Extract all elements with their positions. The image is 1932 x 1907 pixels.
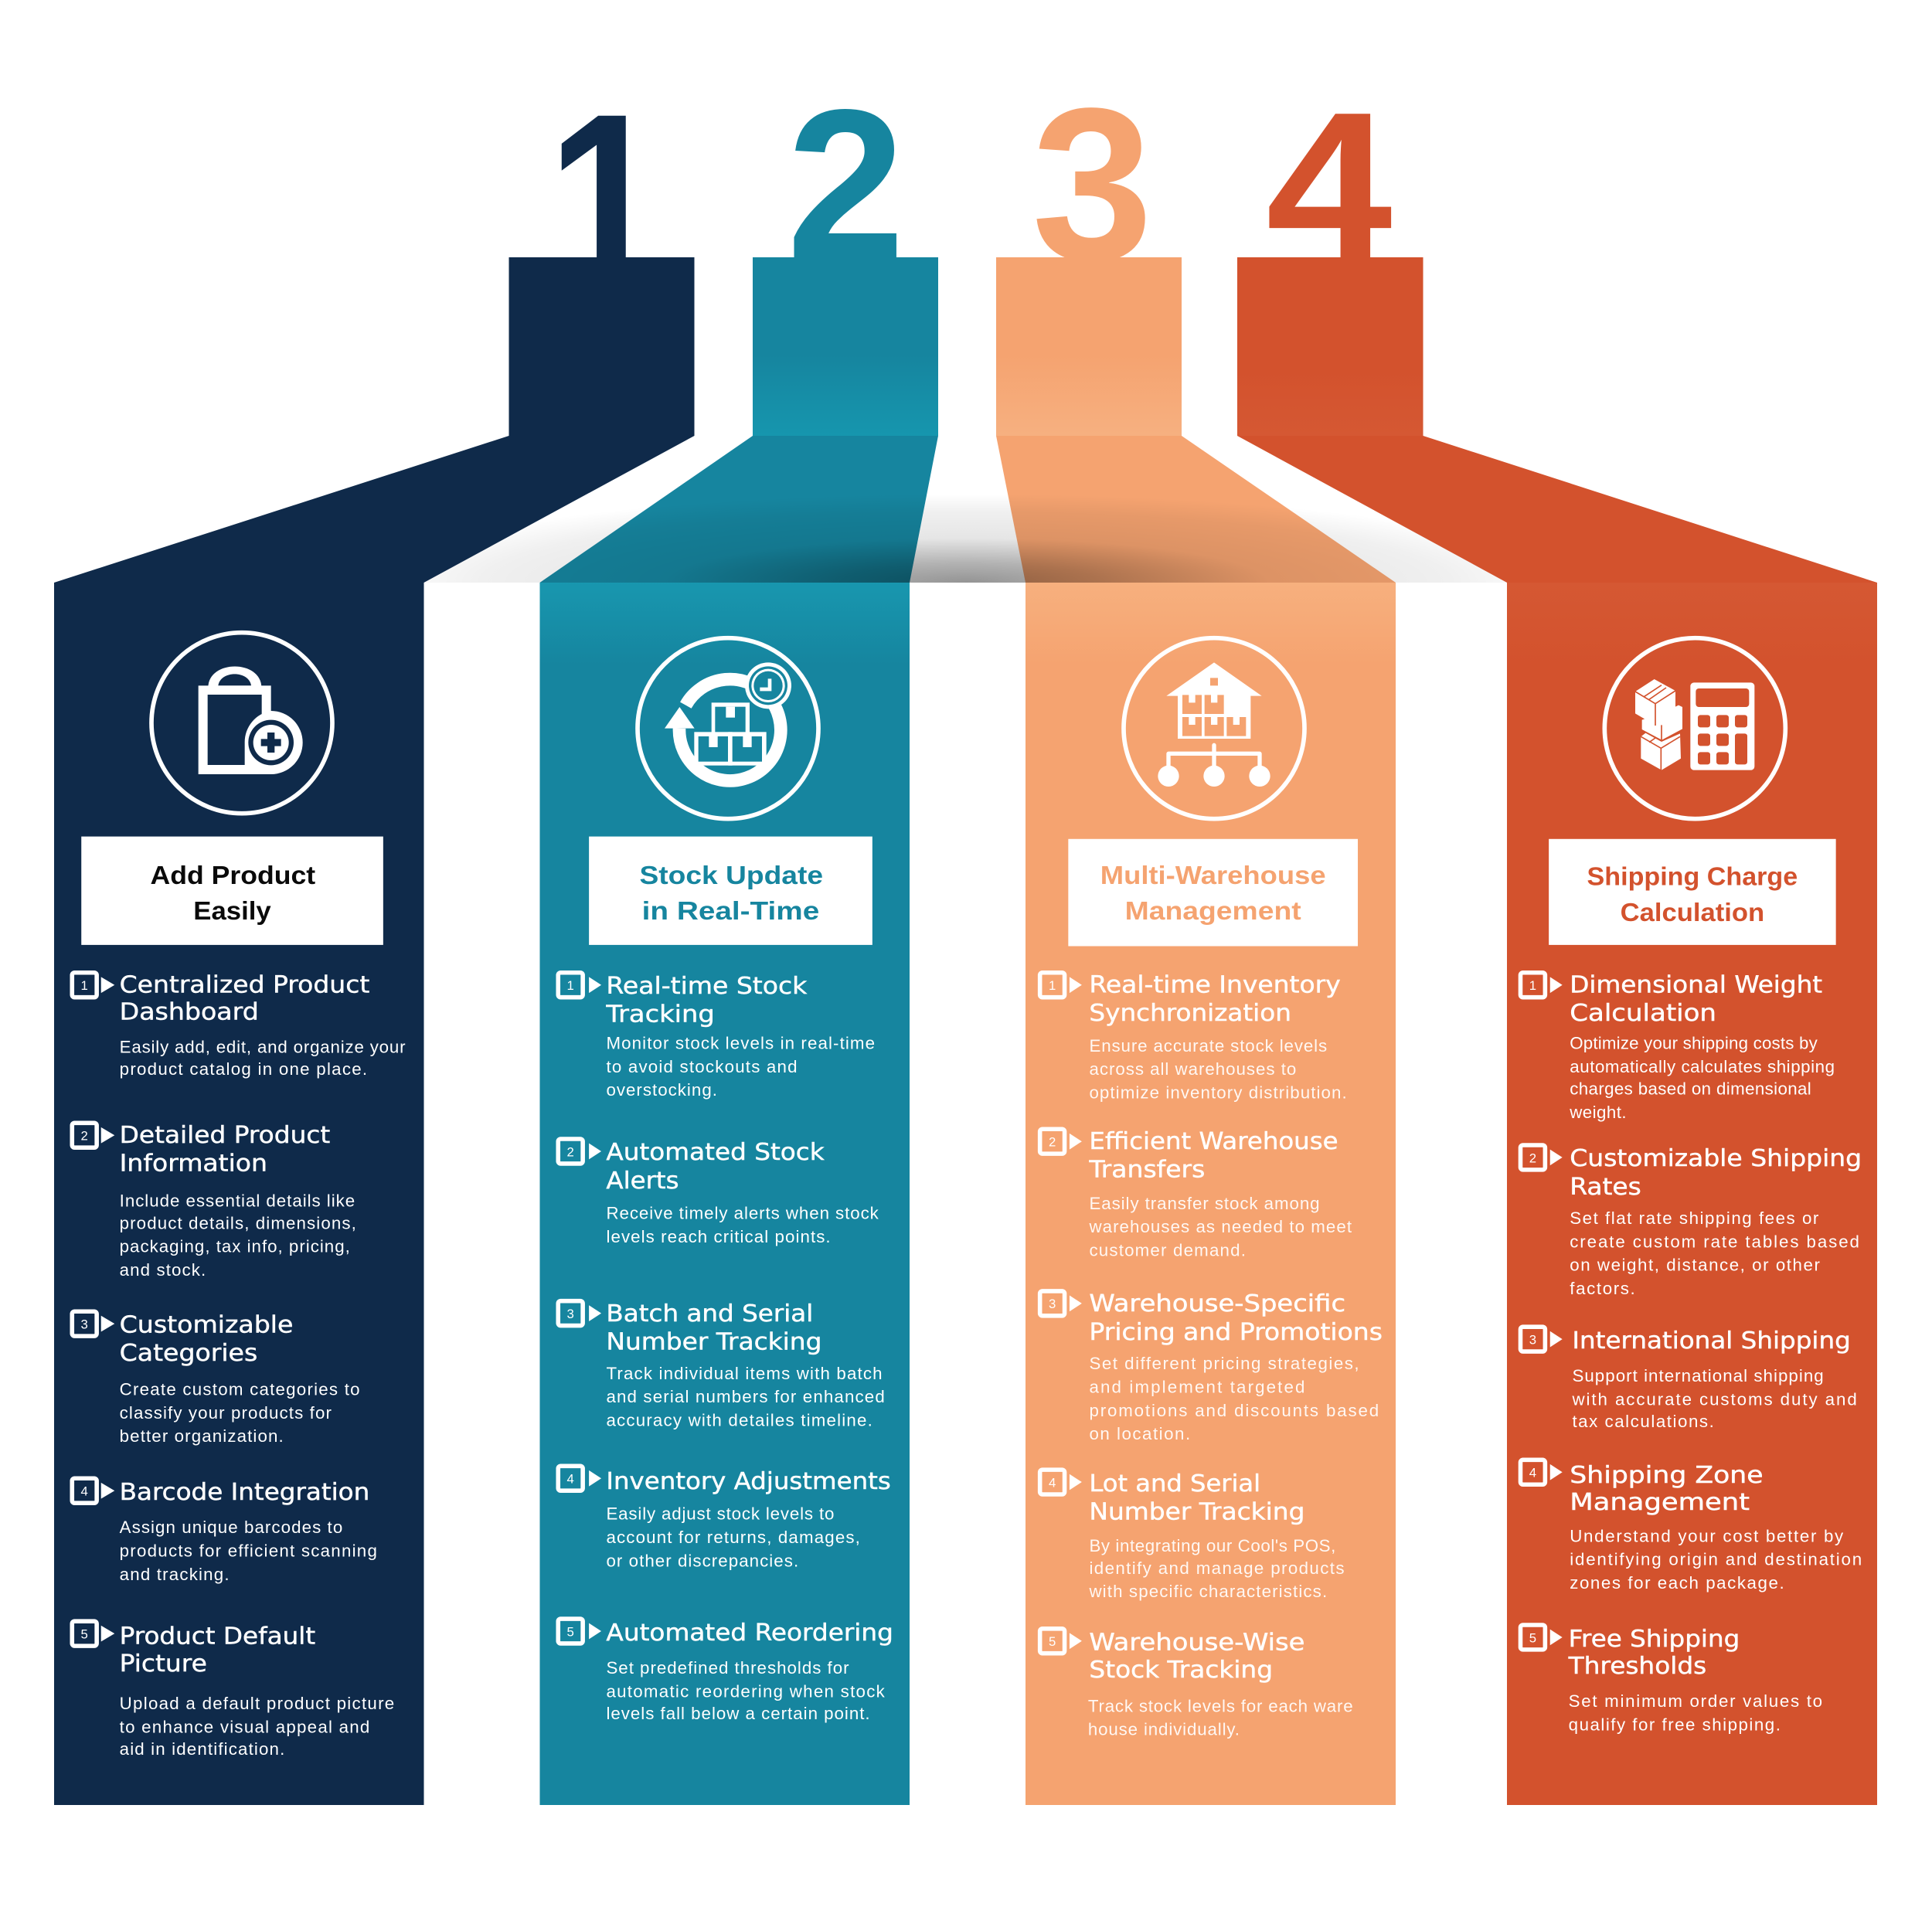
item: Customizable Shipping Rates (1520, 1145, 1862, 1298)
title card: Stock Update in Real-Time: in Real-Time (642, 897, 819, 926)
item: Real-time Inventory Synchronization: Ensure accurate stock levels (1089, 1036, 1327, 1055)
item: Automated Stock Alerts (558, 1139, 879, 1246)
ribbon: column 2 (539, 257, 938, 1805)
title card: Multi-Warehouse Management (1068, 839, 1358, 946)
item: Customizable Shipping Rates: on weight, distance, or other (1570, 1256, 1820, 1275)
item: Automated Stock Alerts: levels reach critical points. (606, 1227, 831, 1246)
icon: stock update cycle (638, 638, 818, 819)
title card: Add Product Easily: Add Product (151, 862, 315, 890)
item: Barcode Integration: products for efficient scanning (120, 1542, 377, 1561)
list: column 4 features (1520, 971, 1862, 1734)
item: Barcode Integration: and tracking. (120, 1565, 230, 1584)
item: Customizable Shipping Rates: factors. (1570, 1279, 1635, 1298)
item: Lot and Serial Number Tracking (1040, 1470, 1344, 1601)
item: Inventory Adjustments: Easily adjust stock levels to (606, 1504, 834, 1524)
ribbon: column 3 (996, 257, 1396, 1805)
item: Efficient Warehouse Transfers: Efficient Warehouse (1089, 1128, 1338, 1155)
item: Automated Reordering: Automated Reordering (606, 1620, 893, 1647)
item: Dimensional Weight Calculation: charges based on dimensional (1570, 1079, 1811, 1099)
number 2: 2 (787, 66, 905, 303)
item: Warehouse-Specific Pricing and Promotions: and implement targeted (1089, 1377, 1304, 1396)
item: Product Default Picture: 5 (81, 1627, 88, 1642)
item: Free Shipping Thresholds: Set minimum order values to (1569, 1691, 1822, 1711)
item: Automated Stock Alerts: Receive timely alerts when stock (606, 1204, 879, 1223)
item: Lot and Serial Number Tracking: 4 (1049, 1475, 1056, 1490)
item: Customizable Shipping Rates: Rates (1570, 1174, 1641, 1201)
item: Detailed Product Information: and stock. (120, 1260, 206, 1280)
item: Warehouse-Specific Pricing and Promotions: Set different pricing strategies, (1089, 1354, 1359, 1373)
item: Inventory Adjustments: Inventory Adjustments (606, 1468, 891, 1495)
icon: warehouse network (1124, 638, 1304, 819)
item: International Shipping: International Shipping (1572, 1327, 1851, 1355)
item: Product Default Picture: Upload a default product picture (120, 1694, 394, 1713)
item: Warehouse-Specific Pricing and Promotions: on location. (1089, 1424, 1190, 1443)
item: Product Default Picture: Picture (120, 1650, 207, 1678)
item: Shipping Zone Management: 4 (1529, 1466, 1536, 1480)
item: Barcode Integration (72, 1478, 377, 1584)
item: Customizable Shipping Rates: create custom rate tables based (1570, 1232, 1859, 1251)
item: Shipping Zone Management (1520, 1460, 1862, 1593)
item: Warehouse-Wise Stock Tracking: 5 (1049, 1634, 1056, 1649)
item: Free Shipping Thresholds: Thresholds (1568, 1653, 1706, 1680)
item: Efficient Warehouse Transfers: customer demand. (1089, 1240, 1246, 1259)
item: Free Shipping Thresholds: qualify for free shipping. (1569, 1715, 1781, 1734)
item: Barcode Integration: 4 (81, 1484, 88, 1499)
item: Customizable Categories (72, 1311, 360, 1446)
item: Customizable Categories: Create custom categories to (120, 1380, 360, 1399)
item: Lot and Serial Number Tracking: Number Tracking (1089, 1499, 1304, 1526)
item: Real-time Stock Tracking (558, 973, 875, 1100)
item: Lot and Serial Number Tracking: identify and manage products (1089, 1559, 1344, 1578)
item: Efficient Warehouse Transfers: warehouses as needed to meet (1088, 1217, 1352, 1236)
item: Free Shipping Thresholds (1520, 1625, 1822, 1734)
item: Inventory Adjustments: or other discrepancies. (606, 1551, 798, 1570)
item: Centralized Product Dashboard: product catalog in one place. (120, 1059, 367, 1079)
item: Customizable Categories: Categories (120, 1340, 257, 1367)
item: International Shipping (1520, 1327, 1857, 1431)
item: Automated Stock Alerts: Automated Stock (606, 1139, 825, 1166)
ribbon: column 4 (1237, 257, 1877, 1805)
item: International Shipping: with accurate customs duty and (1571, 1389, 1857, 1409)
item: Detailed Product Information: packaging, tax info, pricing, (120, 1237, 350, 1256)
title card: Shipping Charge Calculation: Shipping Charge (1587, 863, 1798, 892)
item: Detailed Product Information: Include essential details like (120, 1191, 355, 1211)
item: Batch and Serial Number Tracking (558, 1300, 885, 1430)
item: Customizable Shipping Rates: Customizable Shipping (1570, 1145, 1862, 1172)
item: Detailed Product Information (72, 1122, 356, 1280)
item: Product Default Picture: to enhance visual appeal and (120, 1718, 369, 1737)
item: Real-time Stock Tracking: 1 (567, 978, 574, 993)
list: column 1 features (72, 971, 406, 1759)
title card: Multi-Warehouse Management: Management (1125, 897, 1301, 926)
item: Warehouse-Specific Pricing and Promotions (1040, 1290, 1383, 1443)
title card: Shipping Charge Calculation: Calculation (1621, 899, 1764, 927)
title card: Stock Update in Real-Time (589, 837, 872, 945)
item: Real-time Stock Tracking: Real-time Stock (606, 973, 808, 1000)
item: Automated Reordering: 5 (567, 1624, 574, 1639)
item: Shipping Zone Management: zones for each package. (1570, 1573, 1784, 1593)
item: Shipping Zone Management: Shipping Zone (1570, 1462, 1764, 1489)
item: Automated Reordering: Set predefined thresholds for (606, 1658, 849, 1678)
item: Efficient Warehouse Transfers (1040, 1128, 1352, 1259)
item: Warehouse-Wise Stock Tracking: Warehouse-Wise (1089, 1630, 1304, 1657)
item: Batch and Serial Number Tracking: and serial numbers for enhanced (606, 1387, 885, 1406)
item: Real-time Inventory Synchronization: across all warehouses to (1089, 1059, 1296, 1079)
item: Real-time Inventory Synchronization (1040, 971, 1347, 1102)
item: Automated Reordering: automatic reordering when stock (606, 1681, 886, 1701)
item: Lot and Serial Number Tracking: with specific characteristics. (1088, 1582, 1327, 1601)
item: Warehouse-Wise Stock Tracking: Stock Tracking (1089, 1657, 1273, 1684)
item: Real-time Stock Tracking: overstocking. (606, 1080, 717, 1100)
item: Centralized Product Dashboard: 1 (81, 978, 88, 993)
number 4: 4 (1266, 68, 1394, 301)
item: Dimensional Weight Calculation: Optimize your shipping costs by (1570, 1034, 1818, 1053)
item: Batch and Serial Number Tracking: 3 (567, 1307, 574, 1321)
list: column 3 features (1040, 971, 1383, 1739)
item: Shipping Zone Management: Management (1570, 1489, 1750, 1516)
item: Batch and Serial Number Tracking: Number Tracking (606, 1329, 821, 1356)
item: Real-time Inventory Synchronization: optimize inventory distribution. (1089, 1083, 1347, 1102)
item: Customizable Shipping Rates: 2 (1529, 1151, 1536, 1165)
item: Customizable Categories: better organization. (120, 1426, 284, 1446)
title card: Stock Update in Real-Time: Stock Update (639, 862, 823, 890)
item: International Shipping: Support international shipping (1572, 1366, 1824, 1385)
item: Product Default Picture (72, 1621, 394, 1759)
item: Customizable Categories: classify your products for (120, 1403, 332, 1423)
item: Dimensional Weight Calculation: weight. (1569, 1103, 1627, 1122)
item: Real-time Inventory Synchronization: 1 (1049, 978, 1056, 993)
title card: Add Product Easily: Easily (193, 897, 271, 926)
item: Product Default Picture: aid in identification. (120, 1739, 284, 1759)
item: Dimensional Weight Calculation: Calculation (1570, 1000, 1716, 1027)
title card: Shipping Charge Calculation (1549, 839, 1836, 945)
item: Detailed Product Information: Information (120, 1150, 267, 1177)
item: Dimensional Weight Calculation: Dimensional Weight (1570, 971, 1822, 998)
item: Customizable Categories: 3 (81, 1317, 88, 1332)
item: Free Shipping Thresholds: 5 (1529, 1630, 1536, 1645)
item: Real-time Stock Tracking: Monitor stock levels in real-time (606, 1034, 875, 1053)
item: Warehouse-Wise Stock Tracking: house individually. (1088, 1720, 1240, 1739)
item: Warehouse-Wise Stock Tracking (1040, 1629, 1353, 1739)
item: Efficient Warehouse Transfers: 2 (1049, 1135, 1056, 1150)
item: Lot and Serial Number Tracking: By integrating our Cool's POS, (1089, 1536, 1335, 1555)
item: International Shipping: tax calculations. (1572, 1412, 1714, 1431)
item: Automated Stock Alerts: 2 (567, 1144, 574, 1159)
item: Batch and Serial Number Tracking: Batch and Serial (606, 1300, 813, 1327)
item: Batch and Serial Number Tracking: accuracy with detailes timeline. (606, 1411, 872, 1430)
item: Detailed Product Information: product details, dimensions, (120, 1213, 356, 1232)
item: Dimensional Weight Calculation: 1 (1529, 978, 1536, 993)
item: Customizable Categories: Customizable (120, 1311, 293, 1338)
item: Inventory Adjustments: 4 (567, 1472, 574, 1487)
item: Dimensional Weight Calculation (1520, 971, 1835, 1122)
item: Free Shipping Thresholds: Free Shipping (1569, 1626, 1740, 1653)
number 3: 3 (1032, 63, 1153, 306)
item: Efficient Warehouse Transfers: Easily transfer stock among (1089, 1194, 1320, 1213)
title card: Add Product Easily (81, 837, 383, 945)
item: Automated Reordering: levels fall below a certain point. (606, 1704, 870, 1723)
item: Centralized Product Dashboard: Dashboard (120, 998, 259, 1025)
item: Batch and Serial Number Tracking: Track individual items with batch (606, 1364, 883, 1383)
item: Warehouse-Specific Pricing and Promotions: promotions and discounts based (1089, 1401, 1379, 1420)
item: International Shipping: 3 (1529, 1332, 1536, 1347)
item: Centralized Product Dashboard (72, 971, 406, 1079)
item: Shipping Zone Management: identifying origin and destination (1570, 1550, 1862, 1569)
item: Warehouse-Wise Stock Tracking: Track stock levels for each ware (1088, 1696, 1353, 1715)
item: Inventory Adjustments (558, 1466, 891, 1570)
item: Warehouse-Specific Pricing and Promotions: Pricing and Promotions (1089, 1319, 1383, 1346)
number 1: 1 (547, 62, 665, 341)
item: Warehouse-Specific Pricing and Promotions: Warehouse-Specific (1089, 1290, 1345, 1317)
item: Barcode Integration: Barcode Integration (120, 1479, 369, 1506)
item: Product Default Picture: Product Default (120, 1623, 315, 1650)
item: Customizable Shipping Rates: Set flat rate shipping fees or (1570, 1208, 1819, 1228)
item: Real-time Inventory Synchronization: Real-time Inventory (1089, 971, 1341, 998)
item: Dimensional Weight Calculation: automatically calculates shipping (1570, 1057, 1835, 1076)
ribbon: column 1 (54, 257, 694, 1805)
item: Automated Stock Alerts: Alerts (606, 1168, 679, 1195)
item: Real-time Stock Tracking: to avoid stockouts and (606, 1057, 798, 1076)
item: Detailed Product Information: 2 (81, 1129, 88, 1144)
item: Warehouse-Specific Pricing and Promotions: 3 (1049, 1297, 1056, 1311)
item: Detailed Product Information: Detailed Product (120, 1122, 331, 1149)
item: Efficient Warehouse Transfers: Transfers (1088, 1156, 1205, 1183)
item: Real-time Inventory Synchronization: Synchronization (1089, 1000, 1291, 1027)
item: Real-time Stock Tracking: Tracking (605, 1001, 715, 1028)
item: Centralized Product Dashboard: Centralized Product (120, 971, 370, 998)
item: Barcode Integration: Assign unique barcodes to (120, 1518, 342, 1537)
item: Centralized Product Dashboard: Easily add, edit, and organize your (120, 1037, 406, 1056)
ribbon shadow (363, 494, 1569, 583)
icon: boxes and calculator (1604, 638, 1785, 819)
item: Automated Reordering (558, 1619, 893, 1723)
list: column 2 features (558, 973, 893, 1723)
item: Shipping Zone Management: Understand your cost better by (1570, 1526, 1844, 1545)
item: Inventory Adjustments: account for returns, damages, (606, 1528, 860, 1547)
icon: shopping bag with plus (151, 633, 332, 814)
item: Lot and Serial Number Tracking: Lot and Serial (1089, 1470, 1260, 1497)
title card: Multi-Warehouse Management: Multi-Warehouse (1100, 862, 1326, 890)
